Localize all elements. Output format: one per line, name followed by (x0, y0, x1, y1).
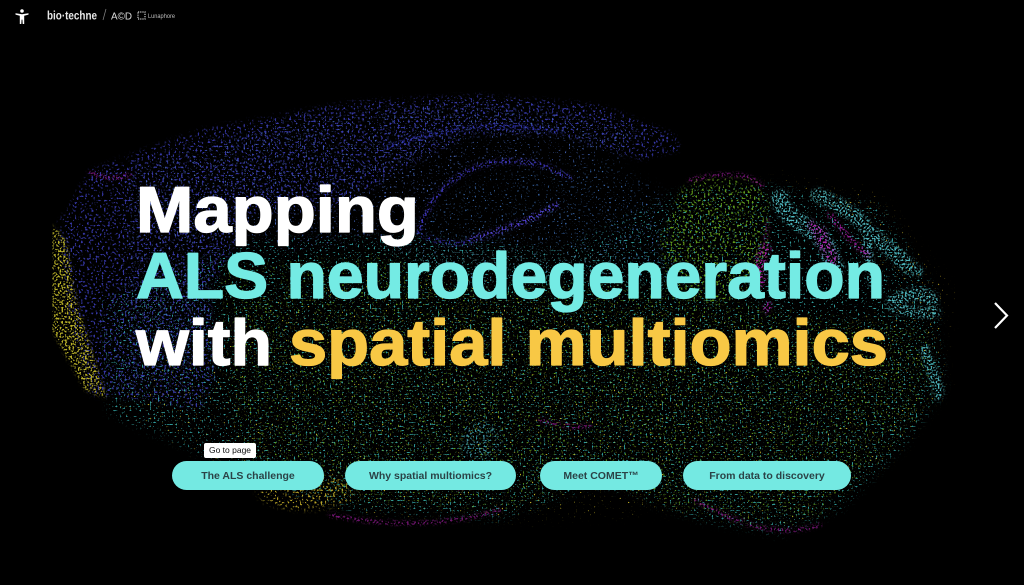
logo: ACD: A©D (111, 10, 132, 22)
tissue base: olive green cells (220, 250, 930, 525)
lower yellow cell cluster (257, 422, 502, 510)
tissue base: teal cells (100, 185, 945, 535)
icon: accessibility figure (16, 9, 28, 24)
tooltip: go to page: Go to page (209, 445, 251, 455)
button: why spatial multiomics (345, 461, 516, 490)
arrow: next page (995, 303, 1007, 328)
magenta patches (90, 172, 868, 530)
cerebellar folds: teal cells (780, 195, 938, 395)
title line 1: Mapping (136, 173, 419, 246)
button: why spatial multiomics: Why spatial multiomics? (369, 470, 492, 482)
title line 3: with (135, 306, 272, 379)
title line 2: ALS neurodegeneration (136, 239, 885, 312)
cerebellum: dense green lobe (660, 178, 768, 305)
button: meet COMET (540, 461, 662, 490)
title (135, 173, 888, 379)
button: the ALS challenge: The ALS challenge (201, 470, 295, 482)
brain tissue spatial image (52, 95, 950, 535)
logo divider (103, 9, 106, 20)
tissue base: yellow cells (110, 175, 950, 525)
hippocampus: bright blue curves (385, 126, 570, 243)
button: from data to discovery (683, 461, 851, 490)
left olfactory area: yellow cells (52, 225, 106, 398)
logo: Lunaphore mark (138, 12, 145, 19)
button: the ALS challenge (172, 461, 324, 490)
title line 3 highlight: spatial multiomics (289, 306, 888, 379)
cortex: outer purple and teal-blue cells (120, 100, 640, 390)
cortex: blue cells (58, 95, 680, 410)
tooltip: go to page (204, 443, 256, 458)
logo: bio-techne: bio·techne (47, 8, 97, 22)
logo: Lunaphore: Lunaphore (148, 13, 175, 20)
button: from data to discovery: From data to discovery (709, 470, 825, 482)
button: meet COMET: Meet COMET™ (563, 470, 639, 482)
midbrain: blue-teal cells (380, 160, 680, 290)
